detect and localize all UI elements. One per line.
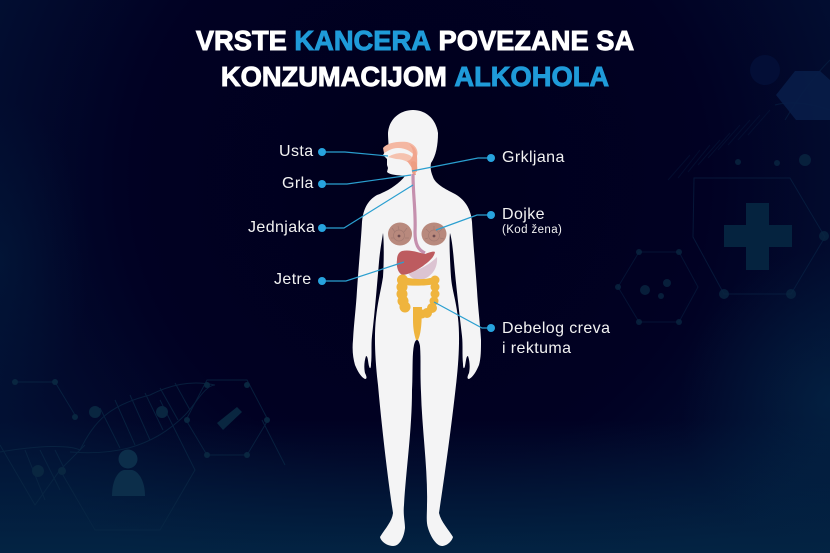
label: Debelog creva i rektuma: i rektuma bbox=[502, 340, 571, 357]
organ: breasts bbox=[388, 222, 446, 246]
label: Grla: Grla bbox=[282, 175, 314, 192]
organ: mouth and throat bbox=[383, 142, 418, 175]
decorative dots: right side bbox=[615, 154, 829, 325]
title bbox=[195, 25, 634, 92]
decorative pattern: right side bbox=[618, 60, 830, 322]
organ: stomach bbox=[408, 257, 437, 280]
label: Debelog creva i rektuma: Debelog creva bbox=[502, 320, 610, 337]
label: Dojke: (Kod žena) bbox=[502, 224, 562, 236]
label: Debelog creva i rektuma bbox=[502, 320, 610, 357]
label: Grkljana: Grkljana bbox=[502, 149, 565, 166]
title: KONZUMACIJOM ALKOHOLA bbox=[221, 61, 609, 92]
connector lines bbox=[323, 152, 491, 328]
label dots bbox=[318, 148, 495, 332]
decorative dna and hexagons: lower left bbox=[0, 380, 285, 530]
label: Jetre: Jetre bbox=[274, 271, 312, 288]
icon: doctor figure bbox=[112, 450, 145, 496]
label: Dojke: Dojke bbox=[502, 206, 545, 223]
label: Dojke bbox=[502, 206, 562, 236]
organ: esophagus bbox=[413, 174, 425, 253]
label: Usta: Usta bbox=[279, 143, 314, 160]
icon: medical cross bbox=[724, 203, 792, 270]
title: VRSTE KANCERA POVEZANE SA bbox=[196, 25, 634, 56]
organ: colon bbox=[396, 274, 440, 340]
organ: liver bbox=[397, 250, 435, 275]
label: Jednjaka: Jednjaka bbox=[248, 219, 315, 236]
human body silhouette bbox=[353, 110, 481, 546]
icon: hexagon top right bbox=[776, 71, 830, 120]
